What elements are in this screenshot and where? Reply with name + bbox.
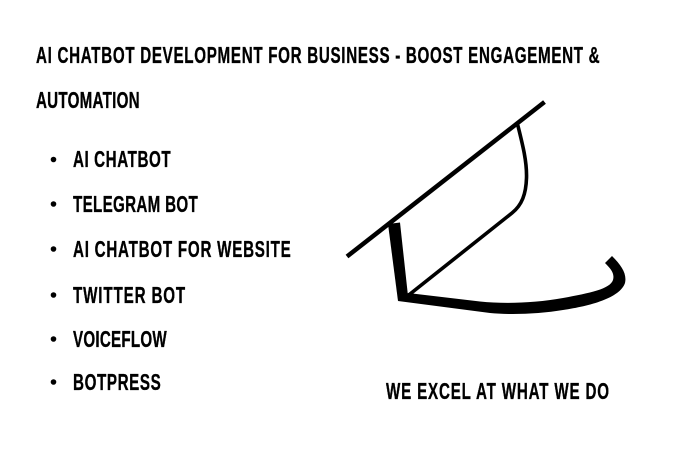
thin curved outline	[405, 124, 527, 298]
abstract line drawing	[347, 102, 625, 314]
list item: Botpress: BOTPRESS	[73, 370, 161, 396]
list item: Twitter Bot: TWITTER BOT	[73, 283, 185, 309]
tagline: WE EXCEL AT WHAT WE DO	[386, 379, 609, 405]
bullet list	[51, 147, 291, 396]
title: AUTOMATION	[36, 88, 140, 114]
list item: AI Chatbot for Website: AI CHATBOT FOR WEBSITE	[73, 237, 291, 263]
thick bottom sweep	[398, 256, 625, 314]
thick left stroke	[388, 222, 408, 301]
title	[36, 43, 600, 114]
list item: Telegram Bot: TELEGRAM BOT	[73, 192, 198, 218]
list item: Voiceflow: VOICEFLOW	[73, 327, 167, 353]
title: AI CHATBOT DEVELOPMENT FOR BUSINESS - BOOST ENGAGEMENT &	[36, 43, 600, 69]
list item: AI Chatbot: AI CHATBOT	[73, 147, 171, 173]
top diagonal line	[347, 102, 544, 256]
